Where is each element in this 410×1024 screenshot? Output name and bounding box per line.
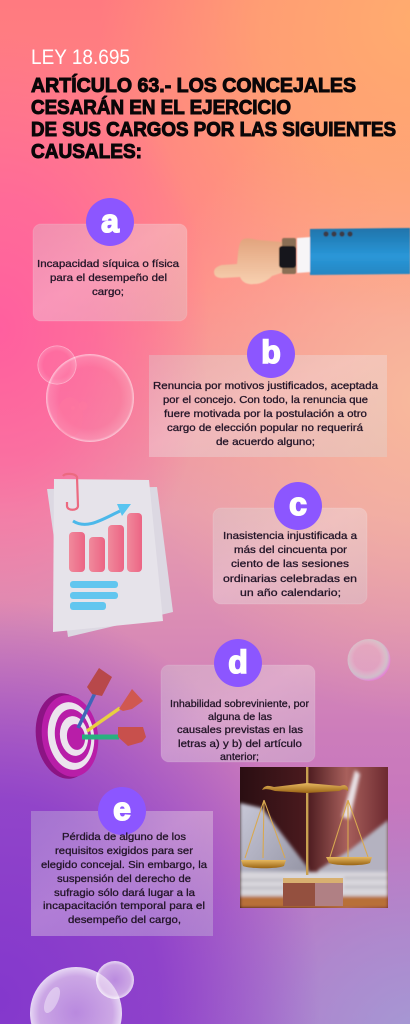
panel: causal e [31, 787, 213, 936]
text: causal c: ordinarias celebradas en [223, 573, 357, 585]
title [31, 74, 396, 163]
text: causal e: elegido concejal. Sin embargo, la [41, 859, 207, 871]
badge: letter a [86, 198, 134, 246]
badge: letter c [274, 482, 322, 530]
badge: letter c: c [289, 486, 307, 522]
text: causal b: cargo de elección popular no requerirá [167, 422, 363, 434]
icon: report with bar chart [47, 474, 173, 637]
text: causal c [223, 530, 357, 599]
panel: causal c [213, 482, 367, 604]
badge: letter e: e [113, 791, 131, 827]
text: causal b: fuere motivada por la postulación a otro [164, 408, 367, 420]
text: causal e: requisitos exigidos para ser [55, 845, 194, 857]
beam [262, 783, 348, 793]
text: causal d: causales previstas en las [177, 724, 303, 736]
title: ARTÍCULO 63.- LOS CONCEJALES [31, 74, 356, 97]
badge: letter b: b [261, 334, 281, 370]
text: causal a: para el desempeño del [50, 272, 167, 284]
icon: target with darts [30, 668, 146, 783]
text: causal e: desempeño del cargo, [68, 914, 181, 926]
text: causal c: un año calendario; [240, 587, 341, 599]
icon: soap bubbles top [38, 346, 134, 442]
badge: letter b [247, 330, 295, 378]
text: causal b: de acuerdo alguno; [216, 436, 315, 448]
badge: letter e [98, 787, 146, 835]
text: causal a [37, 258, 179, 298]
text: causal e: suspensión del derecho de [57, 873, 191, 885]
text: causal d: letras a) y b) del artículo [178, 738, 302, 750]
text: causal c: más del cincuenta por [234, 544, 348, 556]
text: causal b [153, 380, 378, 448]
darts [78, 668, 146, 746]
text: causal e: incapacitación temporal para el [43, 900, 205, 912]
badge: letter a: a [101, 203, 119, 239]
icon: small iridescent bubble [348, 639, 390, 681]
text lines [70, 581, 118, 610]
text: causal c: Inasistencia injustificada a [223, 530, 357, 542]
panel: causal a [33, 198, 187, 321]
pans and chains [245, 800, 368, 858]
title: CAUSALES: [31, 140, 142, 163]
badge: letter d [214, 639, 262, 687]
text: causal c: ciento de las sesiones [231, 558, 349, 570]
photo: scales of justice on open book [240, 767, 388, 908]
text: causal a: Incapacidad síquica o física [37, 258, 179, 270]
heading: ley number: LEY 18.695 [31, 46, 130, 69]
panel: causal b [149, 330, 387, 457]
base [283, 883, 315, 906]
bars [69, 513, 142, 572]
panel: causal d [161, 639, 315, 763]
paper clip [63, 474, 78, 510]
text: causal d: alguna de las [208, 711, 272, 723]
text: causal b: por el concejo. Con todo, la renuncia que [163, 394, 368, 406]
text: causal e [41, 831, 207, 926]
icon: pointing hand with blue sleeve [214, 228, 410, 284]
badge: letter d: d [228, 644, 248, 680]
text: causal d [170, 698, 309, 763]
trend arrow [73, 504, 131, 524]
title: CESARÁN EN EL EJERCICIO [31, 96, 291, 119]
text: causal a: cargo; [92, 286, 124, 298]
text: causal d: anterior; [220, 751, 259, 763]
text: causal b: Renuncia por motivos justificados, aceptada [153, 380, 378, 392]
icon: soap bubbles bottom [30, 961, 134, 1024]
text: causal e: sufragio sólo dará lugar a la [54, 887, 195, 899]
text: causal e: Pérdida de alguno de los [62, 831, 186, 843]
text: causal d: Inhabilidad sobreviniente, por [170, 698, 309, 710]
